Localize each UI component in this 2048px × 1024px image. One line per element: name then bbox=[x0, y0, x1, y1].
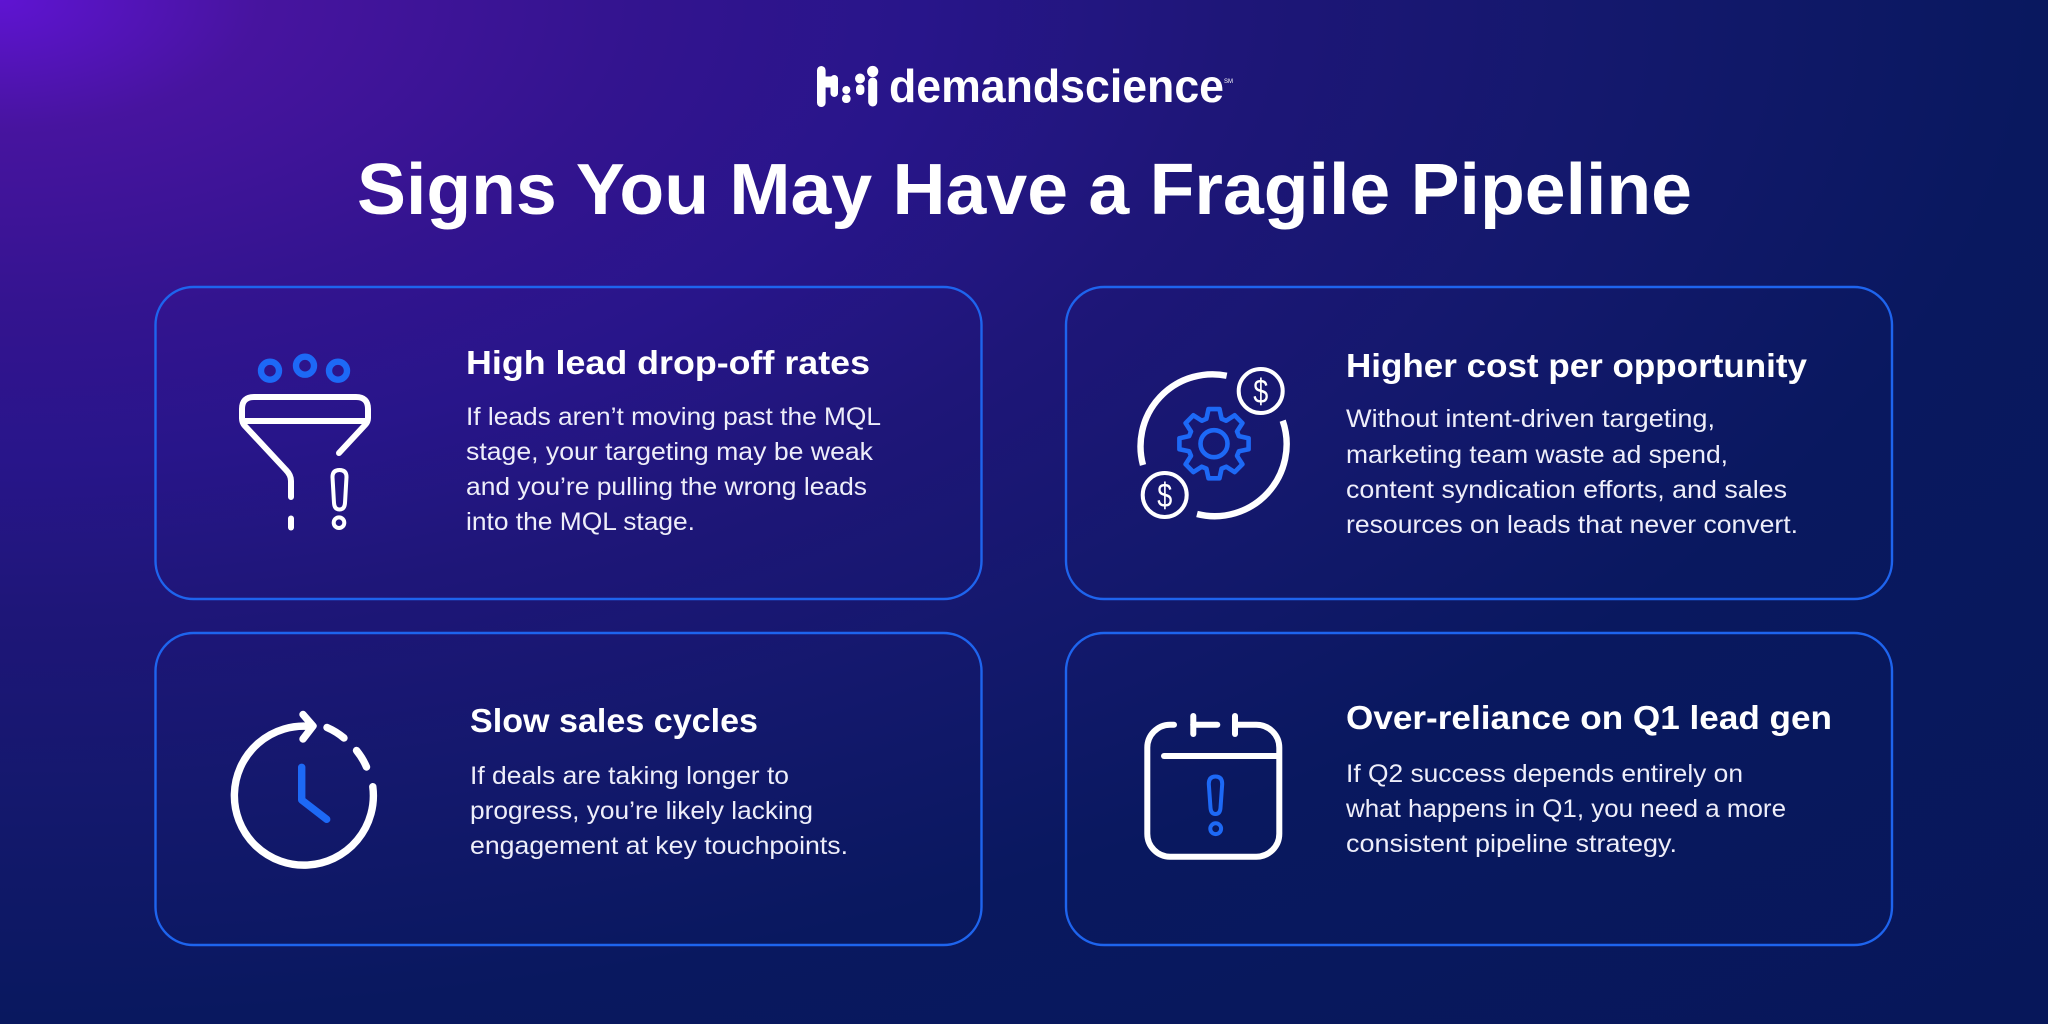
body text: resources on leads that never convert. bbox=[1346, 511, 1798, 539]
panel: slow sales cycles bbox=[156, 633, 982, 945]
body text: stage, your targeting may be weak bbox=[466, 438, 874, 466]
icon: leaking funnel bbox=[242, 357, 368, 528]
icon: gear and dollar coins: $ bbox=[1253, 373, 1268, 411]
panel: high lead drop-off rates bbox=[156, 287, 982, 599]
panel: higher cost per opportunity bbox=[1066, 287, 1892, 599]
heading: Over-reliance on Q1 lead gen bbox=[1346, 700, 1832, 737]
body text: engagement at key touchpoints. bbox=[470, 832, 848, 860]
body text bbox=[1345, 760, 1786, 858]
body text: progress, you’re likely lacking bbox=[470, 797, 813, 825]
body text: If deals are taking longer to bbox=[470, 762, 789, 790]
body text: into the MQL stage. bbox=[466, 508, 695, 536]
logo: demandscience bbox=[817, 60, 1233, 112]
icon: gear and dollar coins: $ bbox=[1157, 477, 1172, 515]
panel: over-reliance on Q1 lead gen bbox=[1066, 633, 1892, 945]
body text bbox=[1346, 405, 1798, 539]
card border bbox=[1066, 633, 1892, 945]
body text: consistent pipeline strategy. bbox=[1346, 830, 1677, 858]
title: Signs You May Have a Fragile Pipeline bbox=[357, 150, 1692, 230]
icon: gear and dollar coins bbox=[1141, 369, 1287, 517]
body text: marketing team waste ad spend, bbox=[1346, 441, 1728, 469]
icon: clock with arrow bbox=[234, 714, 373, 865]
body text: what happens in Q1, you need a more bbox=[1345, 795, 1786, 823]
heading: Slow sales cycles bbox=[470, 703, 758, 740]
body text: If Q2 success depends entirely on bbox=[1346, 760, 1743, 788]
body text: and you’re pulling the wrong leads bbox=[466, 473, 867, 501]
service mark: SM bbox=[1224, 78, 1233, 85]
icon: calendar with alert bbox=[1147, 716, 1279, 857]
body text: Without intent-driven targeting, bbox=[1346, 405, 1715, 433]
card border bbox=[156, 287, 982, 599]
body text bbox=[470, 762, 848, 860]
body text bbox=[466, 403, 881, 536]
card border bbox=[156, 633, 982, 945]
body text: If leads aren’t moving past the MQL bbox=[466, 403, 881, 431]
heading: Higher cost per opportunity bbox=[1346, 348, 1807, 385]
logo mark bbox=[817, 66, 878, 107]
card border bbox=[1066, 287, 1892, 599]
heading: High lead drop-off rates bbox=[466, 345, 870, 382]
logo wordmark: demandscience bbox=[889, 60, 1224, 112]
body text: content syndication efforts, and sales bbox=[1346, 476, 1787, 504]
